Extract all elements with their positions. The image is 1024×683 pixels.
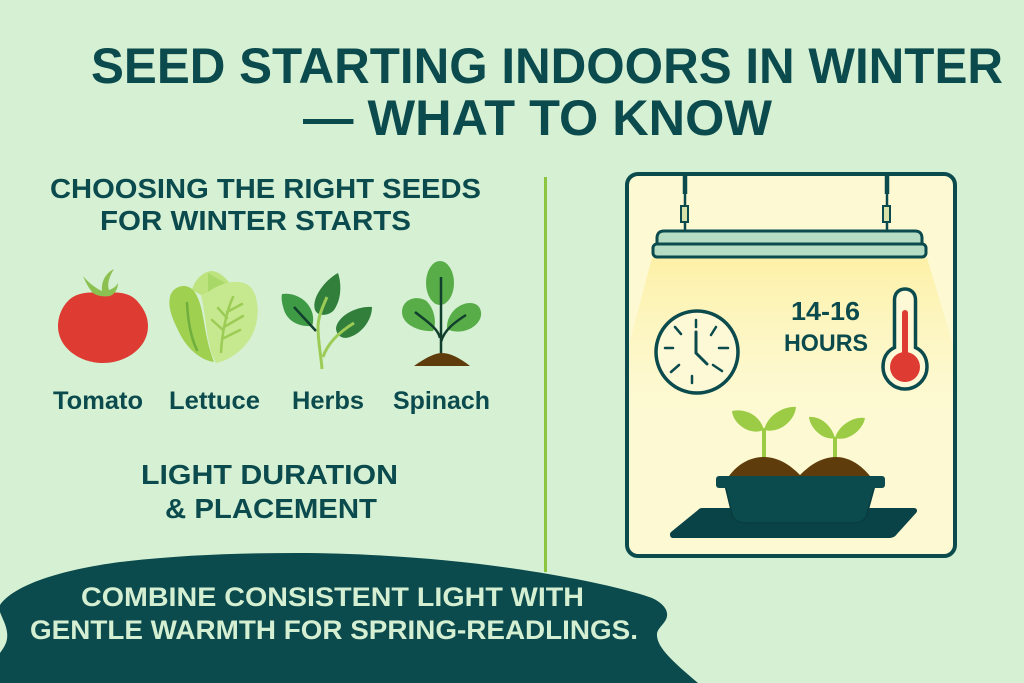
heading: light duration: LIGHT DURATION xyxy=(141,459,398,490)
light beam xyxy=(629,258,953,430)
icon: herbs xyxy=(282,273,372,369)
title: — WHAT TO KNOW xyxy=(303,90,773,146)
heading: choosing seeds: CHOOSING THE RIGHT SEEDS xyxy=(50,173,481,204)
lamp hangers xyxy=(681,176,890,231)
soil mounds xyxy=(729,457,870,476)
seed labels xyxy=(53,387,490,415)
heading: light duration: & PLACEMENT xyxy=(165,493,377,524)
banner text: GENTLE WARMTH FOR SPRING-READLINGS. xyxy=(30,615,638,645)
divider xyxy=(544,177,547,572)
grow lamp xyxy=(653,231,926,257)
seed labels: Spinach xyxy=(393,387,490,415)
seed labels: Tomato xyxy=(53,387,143,415)
icon: tomato xyxy=(58,269,148,363)
seed pot xyxy=(716,476,885,523)
text: 14-16 hours: HOURS xyxy=(784,330,868,357)
seedlings xyxy=(732,407,865,459)
text: 14-16 hours xyxy=(784,296,868,357)
panel: grow light setup xyxy=(627,174,955,556)
heading: light duration xyxy=(141,459,398,524)
title: SEED STARTING INDOORS IN WINTER xyxy=(91,38,1003,94)
banner blob xyxy=(0,553,698,683)
banner text: COMBINE CONSISTENT LIGHT WITH xyxy=(81,582,584,612)
heading: choosing seeds: FOR WINTER STARTS xyxy=(100,205,411,236)
icon: spinach xyxy=(402,261,481,366)
heading: choosing seeds xyxy=(50,173,481,236)
icon: thermometer xyxy=(883,289,927,389)
seed labels: Lettuce xyxy=(169,387,260,415)
title xyxy=(91,38,1003,146)
tray base xyxy=(670,508,917,538)
icon: lettuce xyxy=(169,271,258,363)
seed labels: Herbs xyxy=(292,387,364,415)
text: 14-16 hours: 14-16 xyxy=(791,296,860,326)
icon: clock xyxy=(656,311,738,393)
banner text xyxy=(30,582,638,645)
